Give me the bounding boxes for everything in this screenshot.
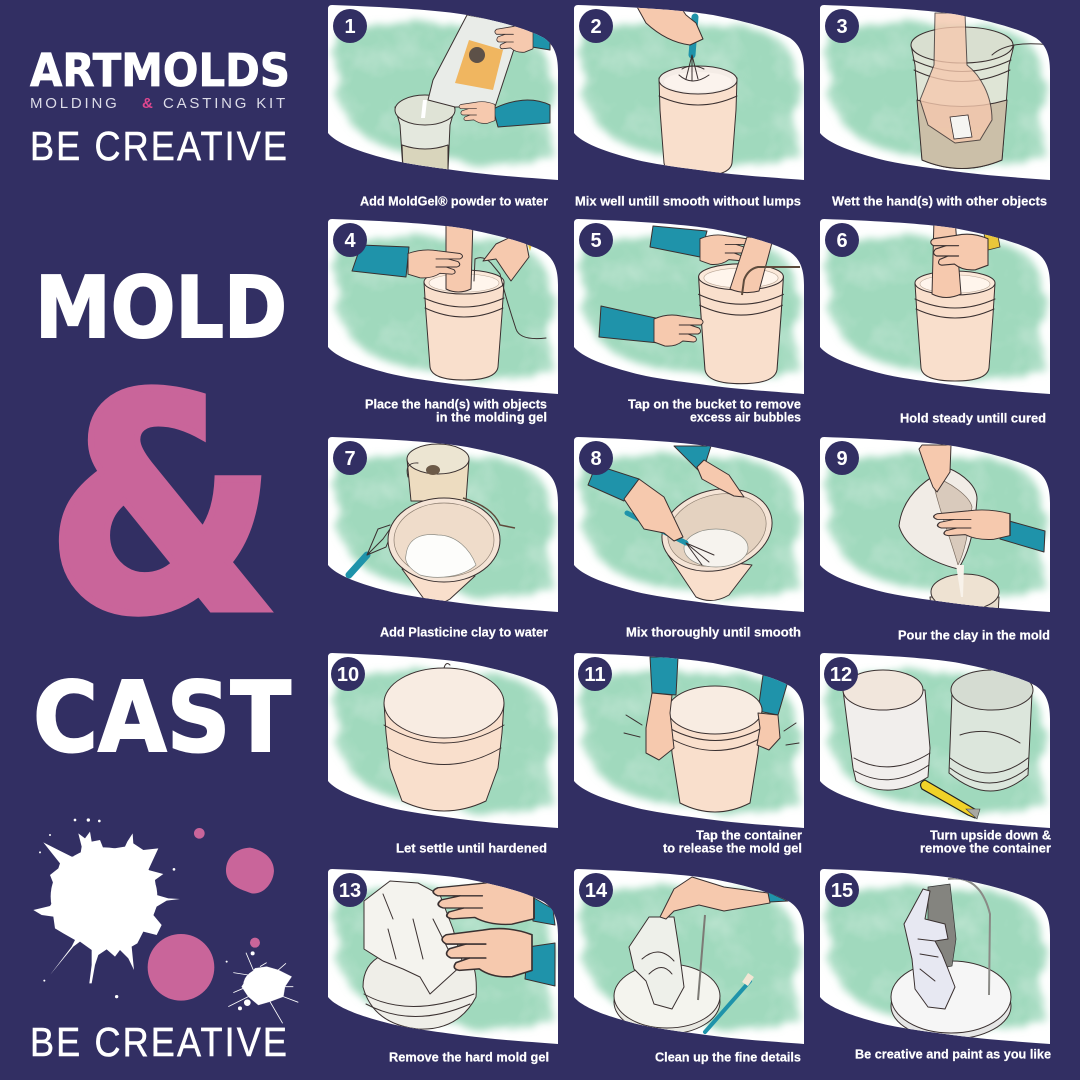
badge 10: 10 — [337, 664, 359, 686]
panel: step 14 — [574, 869, 804, 1044]
gray object — [928, 884, 956, 969]
badge 13: 13 — [339, 880, 361, 902]
panel: step 13 — [328, 869, 558, 1044]
brand logo — [30, 44, 290, 112]
caption 8: Mix thoroughly until smooth — [626, 626, 801, 640]
ripples — [679, 66, 709, 81]
paint splatters — [33, 818, 298, 1023]
motion lines — [624, 715, 799, 745]
pour stream — [956, 565, 964, 597]
title: cast: CAST — [33, 661, 291, 774]
hand — [636, 5, 703, 45]
caption 9: Pour the clay in the mold — [898, 628, 1050, 642]
clay — [406, 535, 476, 577]
left sleeve and hand — [588, 465, 639, 501]
caption 12: remove the container — [920, 842, 1051, 856]
whisk — [692, 17, 695, 55]
arm — [932, 219, 961, 298]
small white splat — [226, 951, 298, 1023]
whisk — [627, 513, 686, 543]
badge 14 — [579, 873, 613, 907]
middle hand and sleeve — [1000, 519, 1045, 552]
badge 4 — [333, 223, 367, 257]
big white splat — [33, 818, 180, 998]
be creative heading top: BE CREATIVE — [30, 124, 289, 170]
tilted bowl — [899, 468, 977, 569]
logo tagline: CASTING KIT — [163, 95, 288, 112]
bowl — [668, 555, 752, 601]
caption 7: Add Plasticine clay to water — [380, 626, 548, 640]
right hand — [483, 236, 529, 281]
badge 3: 3 — [836, 16, 848, 38]
badge 14: 14 — [585, 880, 608, 902]
caption 11: Tap the container — [696, 828, 802, 842]
plaster hand — [629, 917, 684, 1009]
arm and hand — [920, 13, 992, 143]
caption 6: Hold steady untill cured — [900, 412, 1046, 426]
title: mold: MOLD — [35, 259, 287, 358]
bucket — [668, 686, 762, 812]
caption 5 — [628, 398, 801, 424]
logo wordmark: ARTMOLDS — [30, 44, 290, 97]
white mold cylinder — [843, 670, 930, 790]
glass jar — [911, 27, 1014, 168]
badge 10 — [331, 657, 365, 691]
badge 8: 8 — [590, 448, 602, 470]
caption 2: Mix well untill smooth without lumps — [575, 194, 801, 208]
pink drops — [148, 828, 274, 1001]
panel: step 2 — [574, 5, 804, 180]
glass jar — [395, 95, 455, 172]
caption 10: Let settle until hardened — [396, 842, 547, 856]
lower hand and sleeve — [525, 943, 555, 986]
badge 12: 12 — [830, 664, 852, 686]
caption 4 — [365, 398, 547, 424]
badge 1 — [333, 9, 367, 43]
badge 5: 5 — [590, 230, 602, 252]
sleeves — [650, 657, 678, 695]
hands — [530, 29, 550, 50]
wire — [698, 915, 705, 1000]
wire — [992, 44, 1050, 55]
bowl — [402, 569, 475, 603]
caption 12: Turn upside down & — [930, 828, 1051, 842]
panel: step 1 — [328, 5, 558, 180]
arm — [730, 237, 773, 293]
panel: step 8 — [574, 437, 804, 612]
bucket — [699, 264, 783, 384]
badge 15 — [825, 873, 859, 907]
badge 11 — [578, 657, 612, 691]
mold base — [363, 953, 476, 1029]
lower sleeve and hand — [599, 306, 660, 343]
caption 4: Place the hand(s) with objects — [365, 398, 547, 412]
panel: step 6 — [820, 219, 1050, 394]
panel: step 3 — [820, 5, 1050, 180]
caption 14: Clean up the fine details — [655, 1050, 801, 1064]
cuff — [984, 234, 1000, 250]
wire — [463, 498, 515, 528]
wire — [742, 267, 800, 295]
utility knife — [921, 780, 980, 819]
badge 1: 1 — [344, 16, 356, 38]
panel: step 10 — [328, 653, 558, 828]
badge 9: 9 — [836, 448, 848, 470]
badge 12 — [824, 657, 858, 691]
badge 3 — [825, 9, 859, 43]
panel: step 12 — [820, 653, 1050, 828]
plaster base — [891, 961, 1011, 1039]
badge 7: 7 — [344, 448, 356, 470]
hands — [646, 693, 674, 760]
large bucket — [384, 668, 504, 811]
arm — [446, 219, 473, 292]
caption 5: excess air bubbles — [690, 410, 801, 424]
be creative heading bottom: BE CREATIVE — [30, 1020, 289, 1066]
top hand — [919, 445, 951, 492]
upper hand and sleeve — [529, 895, 555, 925]
caption 11 — [663, 828, 802, 856]
caption 12 — [920, 828, 1051, 856]
caption 5: Tap on the bucket to remove — [628, 398, 801, 412]
bucket — [915, 271, 995, 381]
badge 8 — [579, 441, 613, 475]
back bucket — [407, 444, 469, 501]
wire — [474, 258, 546, 339]
wire — [948, 878, 990, 995]
sculpted hand — [904, 889, 955, 1009]
badge 2: 2 — [590, 16, 602, 38]
caption 11: to release the mold gel — [663, 842, 802, 856]
panel: step 4 — [328, 219, 558, 394]
badge 4: 4 — [344, 230, 356, 252]
hand — [931, 234, 988, 270]
caption 1: Add MoldGel® powder to water — [360, 194, 548, 208]
badge 6 — [825, 223, 859, 257]
panel: step 9 — [820, 437, 1050, 617]
caption 15: Be creative and paint as you like — [855, 1048, 1051, 1062]
bucket — [424, 270, 504, 380]
panel: step 15 — [820, 869, 1050, 1044]
badge 6: 6 — [836, 230, 848, 252]
panel: step 11 — [574, 653, 804, 828]
left sleeve and hand — [352, 245, 409, 277]
panel: step 5 — [574, 219, 804, 394]
panel: step 7 — [328, 437, 558, 612]
caption 13: Remove the hard mold gel — [389, 1050, 549, 1064]
wire tip — [444, 664, 450, 668]
upper sleeve and hand — [650, 226, 707, 257]
plaster base — [614, 964, 720, 1034]
logo tagline: & — [142, 95, 156, 112]
badge 7 — [333, 441, 367, 475]
toothbrush — [705, 975, 751, 1032]
crumpled gel — [364, 881, 463, 994]
logo tagline: MOLDING — [30, 95, 120, 112]
badge 13 — [333, 873, 367, 907]
caption 3: Wett the hand(s) with other objects — [832, 194, 1047, 208]
upper sleeve and hand — [674, 446, 711, 474]
badge 9 — [825, 441, 859, 475]
badge 5 — [579, 223, 613, 257]
whisk — [349, 555, 367, 575]
badge 2 — [579, 9, 613, 43]
badge 11: 11 — [584, 664, 606, 686]
caption 4: in the molding gel — [436, 410, 547, 424]
ampersand: & — [46, 333, 278, 680]
badge 15: 15 — [831, 880, 853, 902]
mixture — [684, 529, 748, 567]
bucket — [659, 66, 737, 176]
upper hand and sleeve — [768, 892, 788, 902]
powder bag — [428, 15, 518, 107]
glass container — [949, 670, 1033, 791]
mold below — [930, 597, 999, 617]
